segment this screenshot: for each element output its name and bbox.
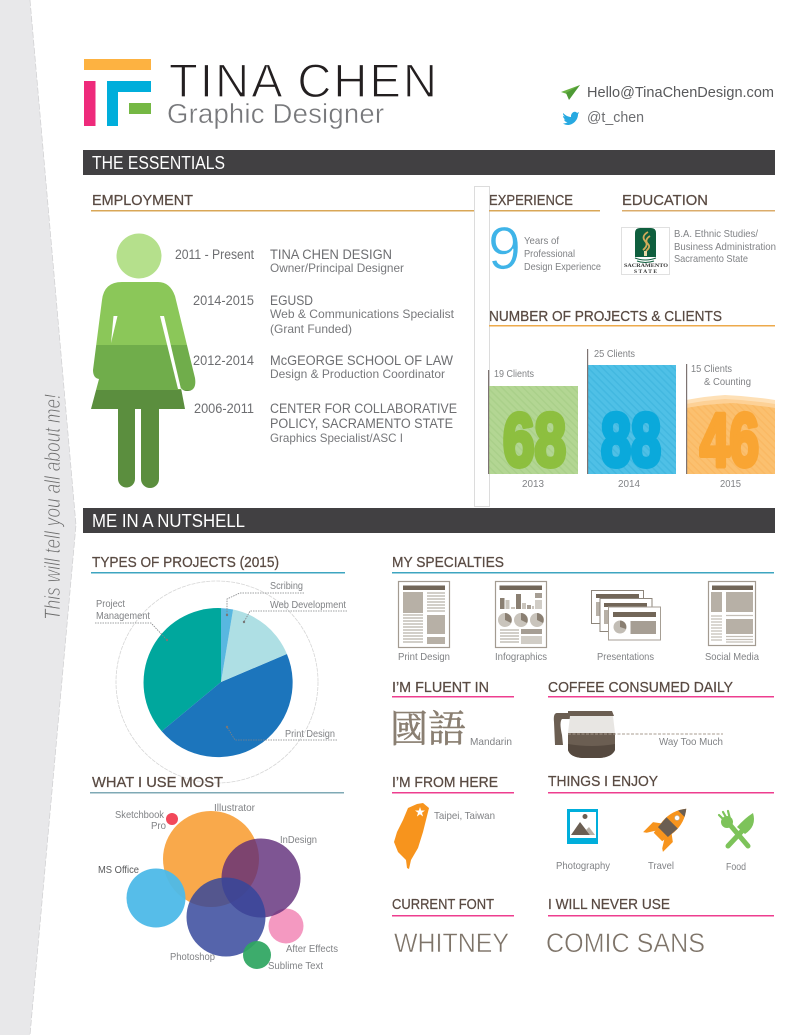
job 1: TINA CHEN DESIGN — [270, 247, 392, 262]
heading: CURRENT FONT — [392, 896, 494, 913]
degree text — [674, 228, 776, 265]
degree text: Business Administration — [674, 241, 776, 253]
bubble labels: Illustrator — [214, 802, 255, 814]
email: Hello@TinaChenDesign.com — [587, 85, 774, 101]
icon: print design — [398, 582, 450, 663]
job 4 — [194, 401, 457, 445]
panel: from here — [392, 774, 514, 869]
heading: EXPERIENCE — [489, 192, 573, 209]
bubble chart — [126, 811, 304, 969]
bar 2013 — [488, 368, 578, 490]
logo — [84, 59, 151, 126]
outer dashed ring — [116, 581, 318, 783]
icon: photography: Photography — [556, 860, 611, 872]
bubble labels — [98, 802, 338, 972]
job 2: EGUSD — [270, 293, 313, 308]
bar 2015: 15 Clients — [691, 363, 732, 375]
job 4: 2006-2011 — [194, 401, 254, 416]
heading: COFFEE CONSUMED DAILY — [548, 679, 733, 696]
panel: what i use most — [90, 774, 344, 972]
bar 2015: 2015 — [720, 478, 741, 490]
location label: Taipei, Taiwan — [434, 810, 495, 822]
icon: rocket: Travel — [648, 860, 674, 872]
icon: twitter bird — [563, 112, 579, 125]
job 4: Graphics Specialist/ASC I — [270, 431, 403, 445]
panel: types of projects — [91, 554, 347, 783]
university logo: STATE — [634, 269, 657, 275]
heading: TYPES OF PROJECTS (2015) — [92, 554, 279, 571]
heading: NUMBER OF PROJECTS & CLIENTS — [489, 308, 722, 325]
coffee label: Way Too Much — [659, 736, 723, 748]
bar 2014: 2014 — [618, 478, 640, 490]
university logo — [622, 228, 670, 275]
heading: EMPLOYMENT — [92, 192, 193, 209]
twitter handle: @t_chen — [587, 110, 644, 126]
pie chart — [144, 608, 293, 757]
job 3: Design & Production Coordinator — [270, 367, 445, 381]
bubble labels: Sketchbook — [115, 809, 165, 821]
icon: food: Food — [726, 861, 746, 873]
section bar: the essentials: THE ESSENTIALS — [92, 153, 225, 173]
font sample: WHITNEY — [394, 928, 509, 958]
bar 2015: & Counting — [704, 376, 751, 388]
section bar: me in a nutshell: ME IN A NUTSHELL — [92, 511, 245, 531]
icon: presentations: Presentations — [597, 651, 654, 663]
side strip — [0, 0, 76, 1035]
bubble labels: After Effects — [286, 943, 338, 955]
bubble labels: MS Office — [98, 864, 139, 876]
column divider — [474, 186, 490, 506]
pie labels: Management — [96, 610, 150, 622]
icon: social media — [705, 582, 759, 663]
panel: things i enjoy — [548, 773, 774, 873]
bar 2015: 46 — [700, 398, 759, 482]
icon: infographics — [495, 582, 547, 663]
heading: I’M FROM HERE — [392, 774, 498, 791]
heading: MY SPECIALTIES — [392, 554, 504, 571]
heading: I’M FLUENT IN — [392, 679, 489, 696]
job 3: McGEORGE SCHOOL OF LAW — [270, 353, 453, 368]
icon: social media: Social Media — [705, 651, 759, 663]
panel: fluent in — [390, 679, 514, 753]
bubble labels: Photoshop — [170, 951, 215, 963]
pie labels: Print Design — [285, 728, 335, 740]
panel: my specialties — [392, 554, 774, 663]
job 2: (Grant Funded) — [270, 322, 352, 336]
panel: education — [622, 192, 776, 275]
bubble labels: Pro — [151, 820, 166, 832]
bar 2013: 68 — [503, 398, 566, 482]
chinese characters: 國語 — [390, 698, 466, 753]
icon: print design: Print Design — [398, 651, 450, 663]
job 2: 2014-2015 — [193, 293, 254, 308]
pie labels: Project — [96, 598, 125, 610]
contact — [561, 85, 774, 126]
section bar: the essentials — [83, 150, 775, 175]
job 1 — [175, 247, 404, 275]
icon: food — [719, 811, 754, 873]
bar 2014: 88 — [601, 398, 661, 482]
years text: Years of — [524, 235, 559, 247]
panel: experience — [489, 194, 601, 272]
font sample: COMIC SANS — [546, 928, 705, 958]
pie labels — [95, 580, 347, 740]
heading: EDUCATION — [622, 192, 708, 209]
years text: Professional — [524, 248, 575, 260]
pie labels: Scribing — [270, 580, 303, 592]
degree text: B.A. Ethnic Studies/ — [674, 228, 758, 240]
panel: projects and clients — [488, 308, 775, 490]
name: TINA CHEN — [169, 54, 437, 107]
bar 2013: 19 Clients — [494, 368, 534, 380]
bar 2015 — [686, 363, 775, 490]
icon: infographics: Infographics — [495, 651, 547, 663]
icon: rocket — [643, 799, 696, 872]
job 2: Web & Communications Specialist — [270, 307, 455, 321]
icon: taiwan map — [394, 803, 429, 869]
icon: coffee pot — [554, 711, 723, 758]
pie labels: Web Development — [270, 599, 346, 611]
heading: WHAT I USE MOST — [92, 774, 223, 791]
big number nine: 9 — [488, 215, 521, 282]
university logo: SACRAMENTO — [624, 263, 669, 269]
bar 2014 — [587, 348, 676, 490]
heading: I WILL NEVER USE — [548, 896, 670, 913]
icon: photography — [556, 809, 611, 872]
panel: employment — [85, 192, 474, 490]
panel: current font — [392, 896, 514, 958]
years text: Design Experience — [524, 261, 601, 273]
years text — [524, 235, 601, 273]
job 1: Owner/Principal Designer — [270, 261, 404, 275]
degree text: Sacramento State — [674, 253, 748, 265]
heading: THINGS I ENJOY — [548, 773, 658, 790]
language label: Mandarin — [470, 736, 512, 748]
bar 2014: 25 Clients — [594, 348, 635, 360]
panel: never use — [546, 896, 774, 958]
figure — [85, 234, 200, 490]
job 3: 2012-2014 — [193, 353, 254, 368]
job 1: 2011 - Present — [175, 247, 254, 262]
panel: coffee — [548, 679, 774, 758]
icon: paper plane — [561, 85, 580, 100]
bubble labels: Sublime Text — [268, 960, 323, 972]
section bar: me in a nutshell — [83, 508, 775, 533]
bubble labels: InDesign — [280, 834, 317, 846]
side note: This will tell you all about me! — [40, 394, 65, 620]
bar 2013: 2013 — [522, 478, 544, 490]
job 4: CENTER FOR COLLABORATIVE — [270, 401, 457, 416]
job 4: POLICY, SACRAMENTO STATE — [270, 416, 453, 431]
job title: Graphic Designer — [167, 98, 384, 129]
job 2 — [193, 293, 455, 336]
job 3 — [193, 353, 453, 381]
icon: presentations — [592, 590, 660, 663]
